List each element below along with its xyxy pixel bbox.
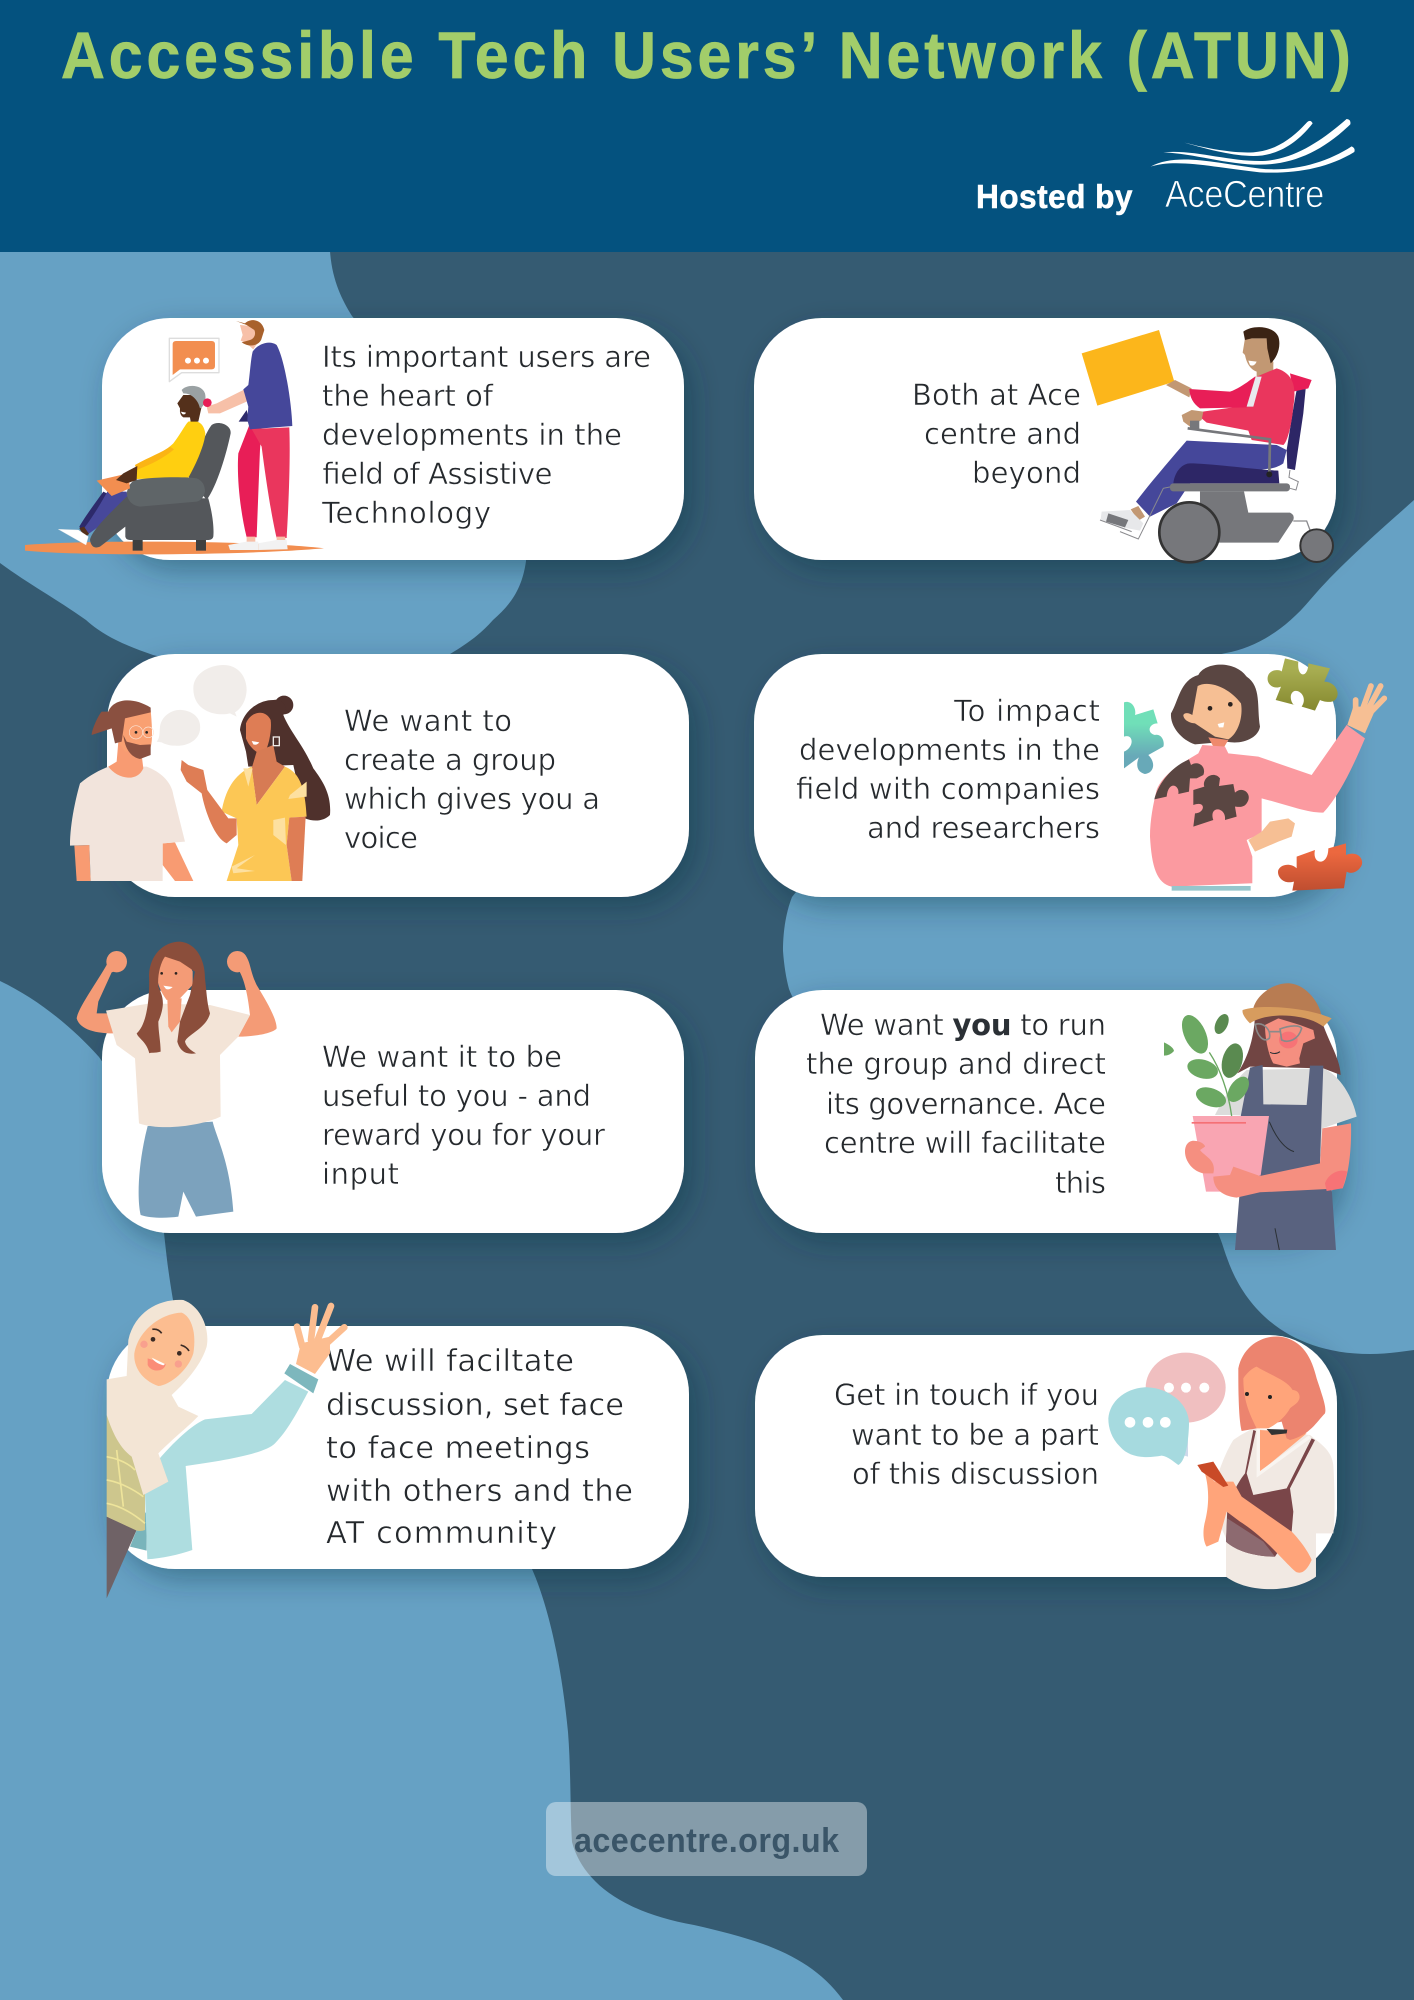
text block: with others and the xyxy=(326,1474,633,1509)
card background xyxy=(102,318,684,560)
text block: developments in the xyxy=(799,733,1100,767)
text block: centre will facilitate xyxy=(824,1126,1106,1160)
illustration: two people talking xyxy=(70,665,330,881)
text block: create a group xyxy=(344,743,556,777)
header band xyxy=(0,0,1414,252)
card background xyxy=(102,990,684,1233)
card background xyxy=(755,990,1337,1233)
text block: Technology xyxy=(321,496,491,530)
text block xyxy=(912,378,1081,490)
title: Accessible Tech Users’ Network (ATUN) xyxy=(61,20,1351,93)
illustration: woman in hijab waving xyxy=(107,1300,344,1598)
illustration: gardener with potted plant xyxy=(1164,983,1357,1250)
text block: which gives you a xyxy=(344,782,600,816)
blob: bottom left xyxy=(0,981,843,2000)
text block: We want it to be xyxy=(322,1040,562,1074)
illustration: woman with puzzle pieces xyxy=(1124,658,1384,891)
text block xyxy=(806,1008,1106,1200)
text block xyxy=(326,1344,633,1551)
text block xyxy=(796,694,1100,845)
card background xyxy=(755,1335,1337,1577)
panel: users at the heart xyxy=(25,318,684,560)
panel: gives you a voice xyxy=(70,654,689,897)
card background xyxy=(754,318,1336,560)
panel: impact developments xyxy=(754,654,1384,897)
text block: voice xyxy=(344,821,418,855)
text block xyxy=(344,704,600,855)
text block: the group and direct xyxy=(806,1047,1106,1081)
text block: field of Assistive xyxy=(322,457,552,491)
panel: get in touch xyxy=(755,1335,1337,1589)
waving hand xyxy=(296,1306,344,1374)
text block: We want you to run xyxy=(820,1008,1106,1042)
text block: field with companies xyxy=(796,772,1100,806)
text block: of this discussion xyxy=(852,1457,1099,1491)
card background xyxy=(754,654,1336,897)
hosted by label: Hosted by xyxy=(976,178,1132,215)
logo swooshes xyxy=(1151,119,1355,173)
text block xyxy=(322,1040,605,1191)
card background xyxy=(107,654,689,897)
text block: and researchers xyxy=(867,811,1100,845)
raised hand xyxy=(1347,686,1384,733)
text block: AT community xyxy=(326,1516,557,1551)
logo wordmark: AceCentre xyxy=(1165,172,1324,215)
text block: Its important users are xyxy=(322,340,651,374)
text block: to face meetings xyxy=(326,1431,590,1466)
text block: We want to xyxy=(344,704,512,738)
logo: Ace Centre xyxy=(1151,119,1355,215)
illustration: woman flexing arms xyxy=(77,942,277,1218)
text block: beyond xyxy=(972,456,1081,490)
text block: its governance. Ace xyxy=(826,1087,1106,1121)
text block: reward you for your xyxy=(322,1118,605,1152)
text block: useful to you - and xyxy=(322,1079,591,1113)
website pill: acecentre.org.uk xyxy=(574,1822,840,1860)
text block: To impact xyxy=(953,694,1100,728)
card background xyxy=(107,1326,689,1569)
text block: the heart of xyxy=(322,379,494,413)
panel: Ace centre and beyond xyxy=(754,318,1336,562)
text block xyxy=(321,340,651,530)
blob: right xyxy=(783,500,1414,1354)
illustration: carer with seated user xyxy=(25,320,324,554)
text block: input xyxy=(322,1157,399,1191)
text block: We will faciltate xyxy=(326,1344,574,1379)
panel: facilitate discussion xyxy=(107,1300,689,1598)
text block: Get in touch if you xyxy=(834,1378,1099,1412)
illustration: woman on phone with speech bubbles xyxy=(1108,1336,1335,1589)
website pill xyxy=(546,1802,867,1876)
text block: discussion, set face xyxy=(326,1388,624,1423)
panel: useful and rewarding xyxy=(77,942,684,1233)
text block: want to be a part xyxy=(851,1418,1099,1452)
panel: you run the group xyxy=(755,983,1357,1250)
text block: developments in the xyxy=(322,418,622,452)
text block: Both at Ace xyxy=(912,378,1081,412)
text block xyxy=(834,1378,1099,1491)
text block: this xyxy=(1055,1166,1106,1200)
illustration: wheelchair user holding card xyxy=(1082,327,1333,562)
text block: centre and xyxy=(924,417,1081,451)
blob: top left xyxy=(0,251,526,677)
